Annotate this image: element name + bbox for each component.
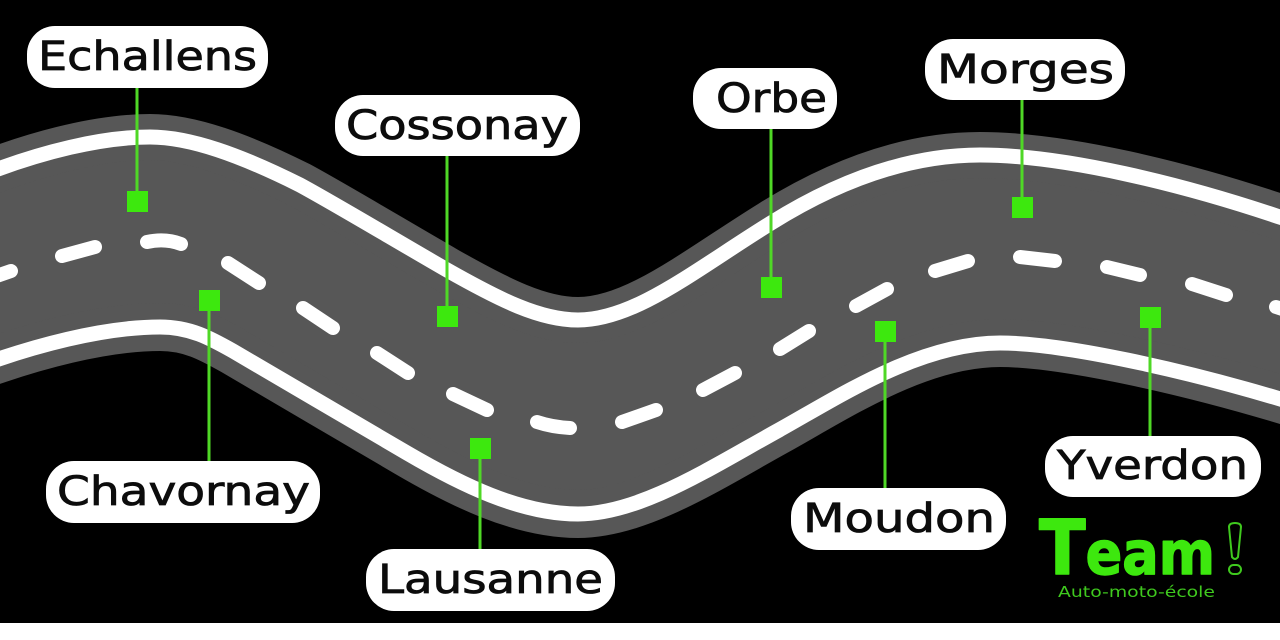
centre dashes — [0, 240, 1280, 428]
label: Echallens — [27, 26, 268, 88]
label: Orbe — [693, 68, 837, 129]
marker: Lausanne — [470, 438, 491, 549]
label: Chavornay: Chavornay — [57, 469, 310, 515]
label: Lausanne: Lausanne — [378, 557, 603, 603]
label: Moudon: Moudon — [803, 496, 995, 542]
road — [0, 137, 1280, 514]
label: Echallens: Echallens — [38, 34, 257, 80]
marker: Yverdon — [1140, 307, 1161, 436]
logo: Team Auto-moto-école — [1039, 505, 1241, 601]
label: Yverdon: Yverdon — [1056, 443, 1248, 489]
marker: Moudon — [875, 321, 896, 488]
road surface — [0, 137, 1280, 514]
marker: Morges — [1012, 100, 1033, 218]
logo tagline: Auto-moto-école — [1058, 583, 1215, 601]
bottom edge line — [0, 327, 1280, 514]
marker: Orbe — [761, 129, 782, 298]
marker: Echallens — [127, 88, 148, 212]
label: Morges — [925, 39, 1125, 100]
label: Moudon — [791, 488, 1006, 550]
label: Orbe: Orbe — [716, 76, 827, 122]
label: Morges: Morges — [937, 47, 1114, 93]
icon: outlined exclamation mark — [1229, 523, 1241, 574]
label: Yverdon — [1045, 436, 1261, 497]
label: Cossonay: Cossonay — [346, 103, 568, 149]
label: Cossonay — [335, 95, 580, 156]
top edge line — [0, 137, 1280, 320]
label: Lausanne — [366, 549, 615, 611]
label: Chavornay — [46, 461, 320, 523]
marker: Cossonay — [437, 156, 458, 327]
marker: Chavornay — [199, 290, 220, 461]
logo wordmark: Team — [1039, 505, 1215, 593]
